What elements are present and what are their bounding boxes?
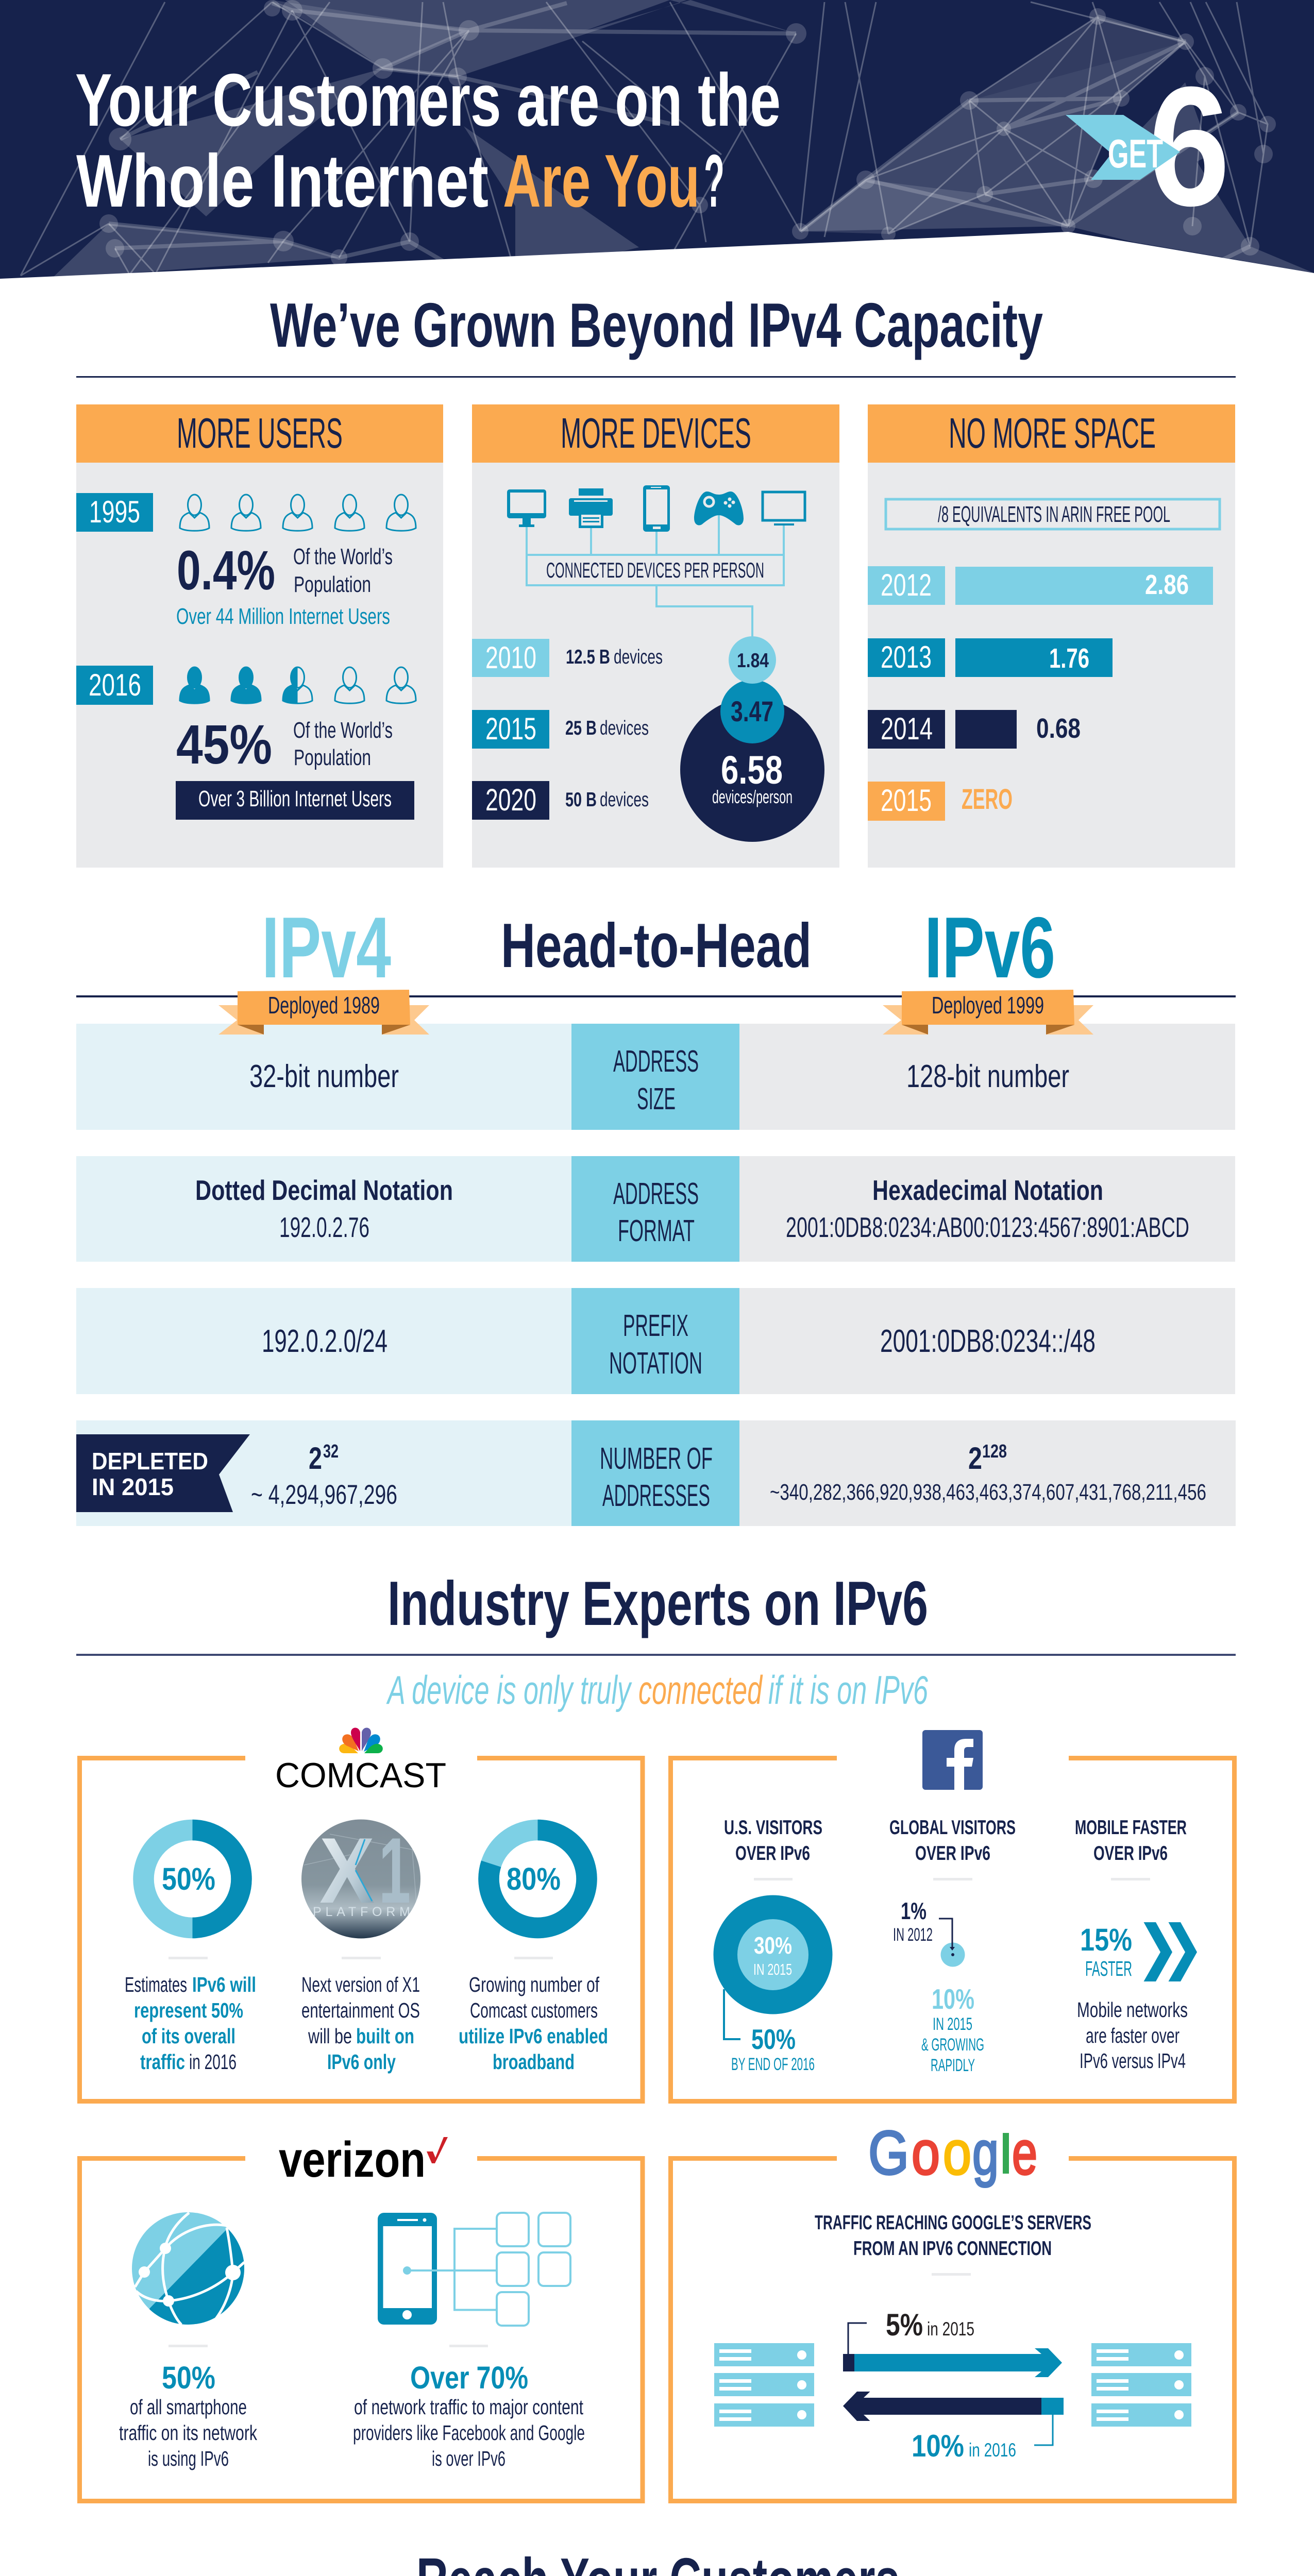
text: smartphone traffic: is using IPv6 bbox=[148, 2447, 229, 2470]
year label 1995: 1995 bbox=[89, 495, 140, 529]
text: smartphone traffic bbox=[119, 2360, 257, 2470]
panel: verizon bbox=[79, 2131, 643, 2501]
row: address size bbox=[76, 1024, 1235, 1130]
logo: google bbox=[868, 2119, 1037, 2188]
title: Whole Internet bbox=[76, 139, 488, 223]
panel: more users bbox=[76, 404, 443, 868]
text: comcast traffic estimate: of its overall bbox=[142, 2024, 235, 2048]
logo: google: g bbox=[972, 2119, 999, 2188]
icon: desktop monitor bbox=[507, 489, 546, 527]
arrow: 5 percent in 2015 bbox=[843, 2308, 1062, 2377]
bar chart: free pool: 2012 bbox=[881, 568, 932, 602]
ribbon: deployed 1989 bbox=[218, 990, 429, 1035]
bubble chart: devices per person: 1.84 bbox=[737, 650, 769, 672]
column headings bbox=[724, 1817, 1187, 1865]
stat: mobile faster: 15% bbox=[1080, 1922, 1132, 1957]
image: X1 platform: 1 bbox=[379, 1819, 411, 1923]
stat: 45 percent: Population bbox=[294, 745, 371, 770]
row: address size: SIZE bbox=[637, 1082, 676, 1116]
chart: global visitors: IN 2012 bbox=[893, 1925, 933, 1945]
text: comcast traffic estimate: represent 50% bbox=[134, 1998, 243, 2022]
stat: 0.4 percent: Of the World’s bbox=[293, 544, 393, 569]
icons: 1995 people bbox=[180, 495, 416, 531]
logo: google: e bbox=[1012, 2119, 1037, 2188]
chart: global visitors: IN 2015 bbox=[933, 2014, 972, 2034]
bubble chart: devices per person: devices/person bbox=[712, 786, 793, 807]
row: number of addresses: ~ 4,294,967,296 bbox=[251, 1480, 397, 1510]
device rows: 25 B bbox=[565, 717, 597, 739]
icon: left servers bbox=[714, 2343, 814, 2427]
arrow: 5 percent in 2015: in 2015 bbox=[927, 2318, 974, 2340]
title: ? bbox=[704, 139, 725, 223]
text: X1 entertainment OS bbox=[301, 1973, 420, 2074]
stat: 45 percent: Of the World’s bbox=[293, 718, 393, 743]
row: address size: 128-bit number bbox=[906, 1059, 1069, 1094]
chart: US visitors: 30% bbox=[754, 1932, 792, 1959]
banner: depleted in 2015: IN 2015 bbox=[92, 1473, 174, 1500]
donut chart: 50 percent bbox=[143, 1830, 242, 1928]
chart: US visitors: IN 2015 bbox=[753, 1960, 792, 1978]
logo: comcast peacock bbox=[339, 1727, 383, 1753]
bar chart: free pool bbox=[868, 566, 1213, 821]
row: prefix notation: 2001:0DB8:0234::/48 bbox=[880, 1324, 1096, 1359]
text: comcast traffic estimate: in 2016 bbox=[189, 2050, 237, 2074]
bar chart: free pool: 1.76 bbox=[1049, 643, 1089, 674]
row: number of addresses: ADDRESSES bbox=[602, 1479, 710, 1513]
chart: global visitors: & GROWING bbox=[921, 2035, 984, 2055]
stat: 0.4 percent: Over 44 Million Internet Users bbox=[176, 604, 390, 629]
device rows: devices bbox=[600, 789, 649, 811]
row: number of addresses: 128 bbox=[982, 1440, 1007, 1462]
stat: mobile faster bbox=[1077, 1922, 1197, 2073]
chart: global visitors: RAPIDLY bbox=[931, 2056, 975, 2075]
donut chart: 50 percent: 50% bbox=[162, 1861, 215, 1896]
text: google heading: TRAFFIC REACHING GOOGLE’S SERVERS bbox=[815, 2212, 1091, 2234]
banner: depleted in 2015 bbox=[76, 1434, 250, 1512]
ribbon: deployed 1989: Deployed 1989 bbox=[268, 992, 380, 1019]
connected devices box: CONNECTED DEVICES PER PERSON bbox=[546, 558, 764, 582]
device rows: 50 B bbox=[565, 789, 597, 811]
stat: mobile faster: are faster over bbox=[1086, 2024, 1180, 2047]
panel: facebook bbox=[671, 1730, 1235, 2101]
device rows bbox=[472, 639, 663, 820]
text: X1 entertainment OS: will be bbox=[308, 2024, 352, 2048]
logo: facebook bbox=[922, 1730, 983, 1790]
banner: depleted in 2015: DEPLETED bbox=[92, 1448, 208, 1475]
device rows: 2010 bbox=[485, 640, 536, 675]
device rows: 2015 bbox=[485, 711, 536, 746]
tagline: connected bbox=[638, 1667, 763, 1713]
logo: google: o bbox=[912, 2119, 940, 2188]
bubble chart: devices per person: 3.47 bbox=[731, 695, 773, 727]
comparison table bbox=[76, 1024, 1236, 1526]
connected devices box bbox=[527, 555, 784, 585]
device connector lines bbox=[527, 515, 784, 639]
stat: 45 percent: Over 3 Billion Internet Users bbox=[198, 786, 392, 811]
row: prefix notation: 192.0.2.0/24 bbox=[262, 1324, 388, 1359]
chart: global visitors: 10% bbox=[932, 1983, 974, 2015]
text: network traffic: of network traffic to major content bbox=[354, 2395, 583, 2419]
icons: 2016 people bbox=[180, 667, 416, 703]
tagline: if it is on IPv6 bbox=[768, 1667, 928, 1713]
text: comcast traffic estimate: traffic bbox=[140, 2050, 185, 2074]
chart: global visitors: 1% bbox=[901, 1897, 926, 1924]
panel: more devices bbox=[472, 404, 839, 868]
heading: capacity: We’ve Grown Beyond IPv4 Capacity bbox=[270, 290, 1043, 360]
stat: mobile faster: FASTER bbox=[1085, 1957, 1132, 1980]
row: address format: Hexadecimal Notation bbox=[872, 1174, 1103, 1206]
title: Your Customers are on the bbox=[75, 58, 781, 142]
row: prefix notation: PREFIX bbox=[623, 1309, 688, 1343]
device rows: 12.5 B bbox=[566, 646, 610, 668]
text: comcast customers bbox=[459, 1973, 608, 2074]
heading: head-to-head: IPv4 bbox=[262, 899, 391, 996]
icon: phone connected to boxes bbox=[378, 2213, 570, 2326]
ribbon: deployed 1999 bbox=[883, 990, 1093, 1035]
header banner bbox=[0, 0, 1314, 279]
panel: google bbox=[671, 2119, 1235, 2501]
image: X1 platform: X bbox=[319, 1819, 375, 1923]
row: prefix notation: NOTATION bbox=[609, 1346, 702, 1380]
chart: global visitors bbox=[893, 1897, 984, 2075]
text: network traffic bbox=[353, 2360, 585, 2470]
text: smartphone traffic: traffic on its network bbox=[119, 2421, 257, 2445]
heading: industry experts: Industry Experts on IPv6 bbox=[388, 1568, 928, 1638]
column headings: GLOBAL VISITORS bbox=[889, 1817, 1016, 1839]
stat: 0.4 percent bbox=[176, 539, 393, 629]
arrow: 5 percent in 2015: 5% bbox=[886, 2308, 923, 2342]
text: comcast traffic estimate bbox=[125, 1973, 256, 2074]
logo: Get6 header bbox=[1066, 51, 1230, 241]
bar chart: free pool: 0.68 bbox=[1036, 713, 1081, 744]
title bbox=[75, 58, 781, 223]
row: address format: 192.0.2.76 bbox=[279, 1211, 369, 1243]
logo: Get6 header: 6 bbox=[1148, 51, 1230, 241]
bar chart: free pool: 2014 bbox=[881, 711, 933, 746]
image: X1 platform bbox=[301, 1819, 421, 1939]
ribbon: deployed 1999: Deployed 1999 bbox=[932, 992, 1044, 1019]
logo: verizon: verizon bbox=[279, 2131, 426, 2188]
row: number of addresses: 2 bbox=[309, 1441, 322, 1476]
column headings: OVER IPv6 bbox=[915, 1842, 990, 1865]
text: network traffic: providers like Facebook and Google bbox=[353, 2421, 585, 2445]
donut chart: 80 percent: 80% bbox=[507, 1861, 561, 1896]
logo: google: o bbox=[943, 2119, 971, 2188]
heading: head-to-head bbox=[262, 899, 1055, 996]
bar chart: free pool: 2.86 bbox=[1145, 569, 1189, 600]
row: prefix notation bbox=[76, 1288, 1235, 1394]
row: number of addresses bbox=[76, 1420, 1236, 1526]
row: address format bbox=[76, 1156, 1235, 1262]
heading: head-to-head: IPv6 bbox=[924, 899, 1055, 996]
panel heading: no more space: NO MORE SPACE bbox=[949, 409, 1156, 457]
stat: 45 percent: 45% bbox=[176, 713, 272, 775]
chart: US visitors bbox=[713, 1895, 833, 2074]
icon: game controller bbox=[694, 492, 744, 526]
text: X1 entertainment OS: built on bbox=[356, 2024, 414, 2048]
arrow: 10 percent in 2016: 10% bbox=[912, 2429, 964, 2463]
tagline: A device is only truly bbox=[386, 1667, 632, 1713]
heading: head-to-head: Head-to-Head bbox=[501, 910, 812, 980]
arrow: 10 percent in 2016 bbox=[843, 2392, 1064, 2463]
text: smartphone traffic: of all smartphone bbox=[130, 2395, 247, 2419]
row: address format: Dotted Decimal Notation bbox=[195, 1174, 453, 1206]
text: network traffic: is over IPv6 bbox=[432, 2447, 506, 2470]
stat: 45 percent bbox=[176, 713, 414, 820]
text: google heading bbox=[815, 2212, 1091, 2260]
icon: right servers bbox=[1091, 2343, 1191, 2427]
column headings: OVER IPv6 bbox=[735, 1842, 810, 1865]
text: network traffic: Over 70% bbox=[410, 2360, 528, 2395]
column headings: MOBILE FASTER bbox=[1075, 1817, 1187, 1839]
text: comcast customers: Comcast customers bbox=[470, 1998, 598, 2022]
device rows: devices bbox=[614, 646, 663, 668]
icon: printer bbox=[569, 488, 613, 528]
bar chart: free pool: 2015 bbox=[881, 783, 932, 818]
text: smartphone traffic: 50% bbox=[162, 2360, 215, 2395]
text: comcast customers: broadband bbox=[493, 2050, 575, 2074]
text: comcast customers: Growing number of bbox=[469, 1973, 599, 1996]
bar chart: free pool: 2013 bbox=[881, 640, 932, 674]
text: X1 entertainment OS: IPv6 only bbox=[327, 2050, 396, 2074]
image: X1 platform: PLATFORM bbox=[313, 1905, 410, 1919]
text: X1 entertainment OS: entertainment OS bbox=[301, 1998, 420, 2022]
free pool label bbox=[886, 499, 1220, 529]
bubble chart: devices per person: 6.58 bbox=[721, 748, 783, 792]
title: Are You bbox=[503, 139, 700, 223]
panel: comcast bbox=[79, 1727, 643, 2101]
row: address size: ADDRESS bbox=[613, 1044, 699, 1078]
panel heading: more devices: MORE DEVICES bbox=[561, 409, 751, 457]
tagline bbox=[386, 1667, 928, 1713]
text: google heading: FROM AN IPV6 CONNECTION bbox=[853, 2238, 1052, 2260]
column headings: OVER IPv6 bbox=[1093, 1842, 1168, 1865]
logo: Get6 header: GET bbox=[1108, 131, 1163, 176]
row: address format: FORMAT bbox=[618, 1214, 695, 1248]
panel: no more space bbox=[868, 404, 1235, 868]
arrow: 10 percent in 2016: in 2016 bbox=[969, 2439, 1016, 2461]
stat: mobile faster: Mobile networks bbox=[1077, 1998, 1188, 2022]
row: number of addresses: NUMBER OF bbox=[600, 1442, 713, 1476]
bar chart: free pool: ZERO bbox=[962, 783, 1013, 815]
chart: US visitors: 50% bbox=[751, 2023, 796, 2055]
text: comcast traffic estimate: IPv6 will bbox=[192, 1973, 256, 1996]
device rows: 2020 bbox=[485, 783, 536, 817]
icon: television bbox=[763, 492, 805, 526]
row: address size: 32-bit number bbox=[249, 1059, 399, 1094]
stat: 0.4 percent: Population bbox=[294, 572, 371, 597]
text: comcast customers: utilize IPv6 enabled bbox=[459, 2024, 608, 2048]
text: comcast traffic estimate: Estimates bbox=[125, 1973, 187, 1996]
logo: google: G bbox=[868, 2119, 909, 2188]
donut chart: 80 percent bbox=[488, 1830, 586, 1928]
column headings: U.S. VISITORS bbox=[724, 1817, 822, 1839]
stat: mobile faster: IPv6 versus IPv4 bbox=[1080, 2049, 1186, 2073]
row: number of addresses: 2 bbox=[968, 1441, 982, 1476]
text: X1 entertainment OS: Next version of X1 bbox=[301, 1973, 420, 1996]
row: number of addresses: 32 bbox=[323, 1440, 339, 1462]
device rows: devices bbox=[600, 717, 649, 739]
row: address format: ADDRESS bbox=[613, 1177, 699, 1211]
chart: US visitors: BY END OF 2016 bbox=[731, 2055, 815, 2074]
logo: comcast wordmark: COMCAST bbox=[275, 1756, 446, 1795]
stat: 0.4 percent: 0.4% bbox=[177, 539, 275, 601]
panel heading: more users: MORE USERS bbox=[177, 409, 343, 457]
icon: double chevron bbox=[1144, 1922, 1197, 1981]
bubble chart: devices per person bbox=[680, 636, 824, 842]
icon: network globe bbox=[132, 2212, 244, 2325]
year label 2016: 2016 bbox=[89, 668, 141, 702]
icon: smartphone bbox=[643, 485, 670, 532]
